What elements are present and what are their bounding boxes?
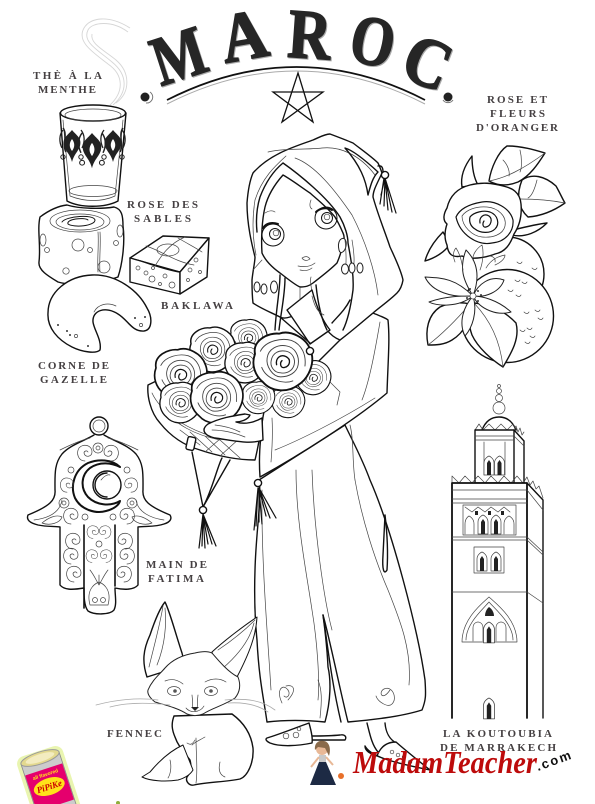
label: rose des sables: ROSE DES (127, 199, 198, 211)
hood tassel (378, 166, 396, 213)
icon: Koutoubia tower (452, 384, 543, 719)
label group: ROSE ET (487, 94, 548, 106)
label: corne de gazelle: GAZELLE (40, 374, 107, 386)
girl (148, 134, 430, 770)
robe (255, 425, 426, 722)
icon: hand of Fatima (27, 417, 171, 614)
roses (230, 319, 267, 356)
title: M (142, 11, 216, 101)
icon: rose des sables (39, 205, 124, 284)
oranges (470, 237, 544, 311)
strings and lower tassel (192, 452, 230, 548)
necklace bead (306, 347, 314, 355)
label: corne de gazelle: CORNE DE (38, 360, 109, 372)
feet (300, 725, 346, 740)
icon: star (273, 73, 323, 122)
label: main de fatima (146, 559, 207, 585)
large arch (462, 597, 517, 642)
tail (142, 745, 193, 781)
label: koutoubia (440, 728, 556, 754)
icon: can: PiPiKe (35, 778, 63, 795)
citrus leaves (427, 303, 470, 345)
dome and finial (475, 384, 524, 435)
logo: MadamTeacher (352, 744, 537, 780)
title arc and dots (140, 67, 453, 104)
title: O (343, 0, 402, 84)
blossom petals (425, 245, 511, 336)
icon: corne de gazelle (48, 275, 151, 352)
earrings (338, 238, 346, 253)
label: tea: THÈ À LA (33, 70, 102, 82)
label: main de fatima: MAIN DE (146, 559, 207, 571)
head (148, 652, 240, 716)
hand (204, 414, 263, 442)
label: koutoubia: LA KOUTOUBIA (443, 728, 552, 740)
icon: can: all flavored (32, 768, 59, 782)
face (262, 175, 344, 287)
label group: D'ORANGER (476, 122, 559, 134)
label group: FLEURS (490, 108, 545, 120)
arcade windows (463, 505, 516, 535)
hood (247, 134, 403, 340)
rose bloom (444, 183, 521, 258)
label: rose des sables: SABLES (134, 213, 191, 225)
icon: baklava (130, 236, 209, 294)
label: tea: MENTHE (38, 84, 96, 96)
icon: rose and orange blossom (425, 94, 565, 367)
label: fennec: FENNEC (107, 728, 162, 740)
upper tower (475, 430, 514, 483)
rose leaves (489, 146, 545, 185)
label: baklawa: BAKLAWA (161, 300, 233, 312)
sleeve bead and tassel (254, 479, 276, 530)
icon: tea steam (82, 19, 130, 105)
eyes (262, 224, 284, 246)
icon: doll (310, 741, 344, 785)
label: main de fatima: FATIMA (148, 573, 204, 585)
label: corne de gazelle (38, 360, 109, 386)
label group (476, 94, 559, 134)
label: rose des sables (127, 199, 198, 225)
body (172, 714, 253, 785)
icon: fennec (142, 602, 257, 785)
title: C (392, 19, 463, 107)
ears (144, 602, 185, 677)
icon: tea glass (60, 105, 126, 206)
label: tea (33, 70, 102, 96)
title (142, 0, 463, 107)
small mark at bottom (116, 801, 120, 804)
icon: can (15, 744, 84, 804)
bowl (148, 360, 264, 460)
shaft (452, 483, 527, 718)
logo: .com (534, 747, 573, 774)
torso and sleeve (259, 313, 389, 477)
whiskers (96, 699, 275, 712)
neck and collar (287, 290, 330, 344)
label: koutoubia: DE MARRAKECH (440, 742, 556, 754)
battlements (452, 476, 543, 498)
